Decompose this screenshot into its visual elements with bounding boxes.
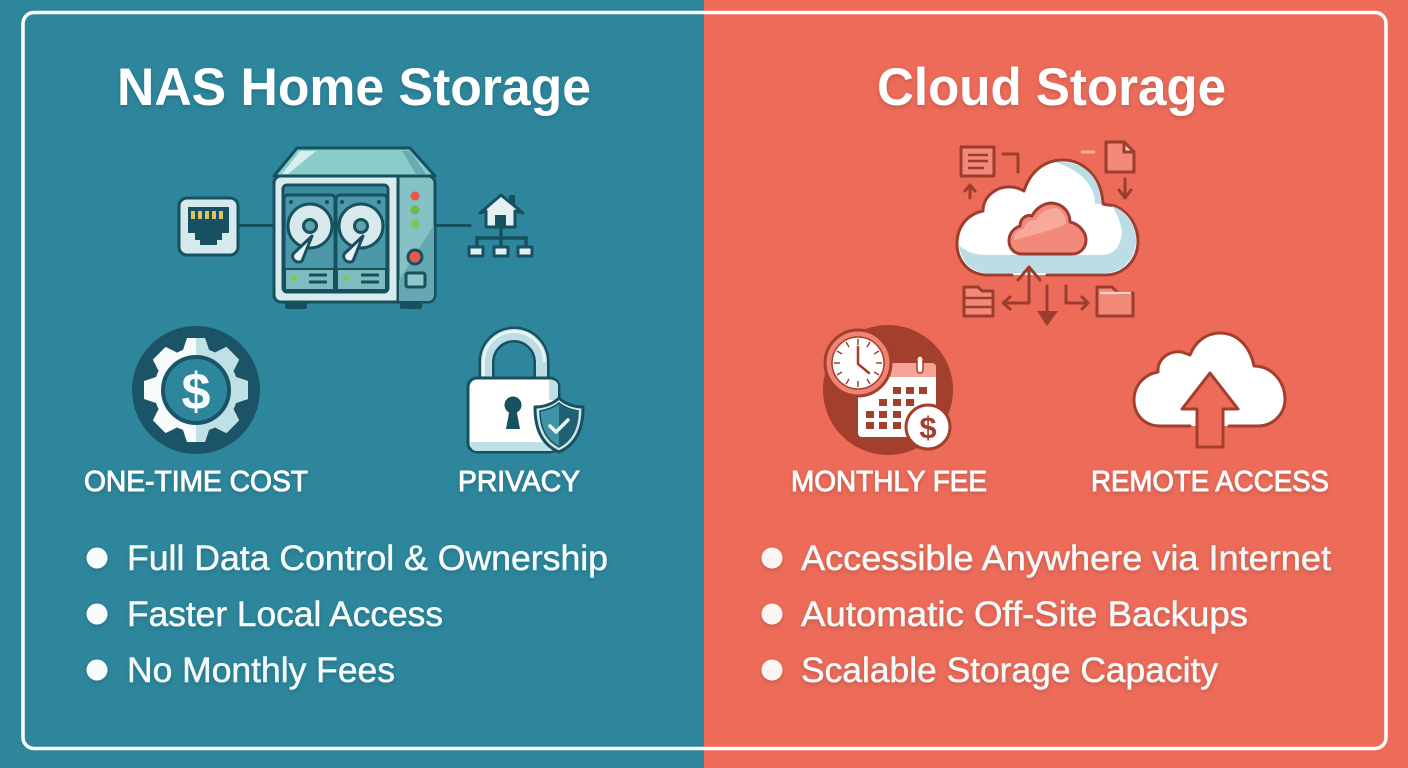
icon: privacy padlock with shield	[468, 331, 583, 452]
icon: home network	[469, 195, 532, 256]
icon: monthly fee calendar and clock: $	[919, 410, 937, 445]
label: privacy: PRIVACY	[458, 466, 580, 498]
label: one-time cost: ONE-TIME COST	[84, 466, 308, 498]
panel: cloud storage	[704, 0, 1408, 768]
list: NAS benefits: Faster Local Access	[127, 595, 443, 634]
icon: one-time cost gear: $	[182, 363, 211, 421]
list: cloud benefits: Accessible Anywhere via Internet	[801, 539, 1331, 578]
icon: NAS device	[274, 148, 435, 309]
icon: one-time cost gear	[132, 326, 260, 454]
list: cloud benefits	[762, 539, 1331, 690]
list: cloud benefits: Automatic Off-Site Backups	[801, 595, 1248, 634]
icon: ethernet port	[179, 198, 238, 255]
title: Cloud Storage: Cloud Storage	[877, 58, 1226, 117]
list: NAS benefits	[86, 539, 608, 690]
list: NAS benefits: No Monthly Fees	[127, 651, 395, 690]
icon: remote access upload cloud	[1134, 333, 1285, 447]
connector: NAS to home network	[435, 224, 470, 227]
icon: cloud with files and arrows	[957, 142, 1138, 326]
drive bay 1	[284, 195, 335, 291]
title: NAS Home Storage: NAS Home Storage	[117, 58, 591, 117]
file icon: folder	[1097, 287, 1133, 316]
panel: NAS home storage	[84, 68, 608, 692]
file icon: folder stack	[964, 287, 993, 316]
file icon: page	[1106, 142, 1134, 172]
file icon: document list	[961, 147, 994, 176]
label: remote access: REMOTE ACCESS	[1091, 466, 1329, 498]
icon: monthly fee calendar and clock	[823, 325, 953, 455]
drive bay 2	[336, 195, 387, 291]
list: cloud benefits: Scalable Storage Capacity	[801, 651, 1219, 690]
list: NAS benefits: Full Data Control & Ownership	[127, 539, 608, 578]
connector: port to NAS	[238, 224, 274, 227]
label: monthly fee: MONTHLY FEE	[791, 466, 987, 498]
